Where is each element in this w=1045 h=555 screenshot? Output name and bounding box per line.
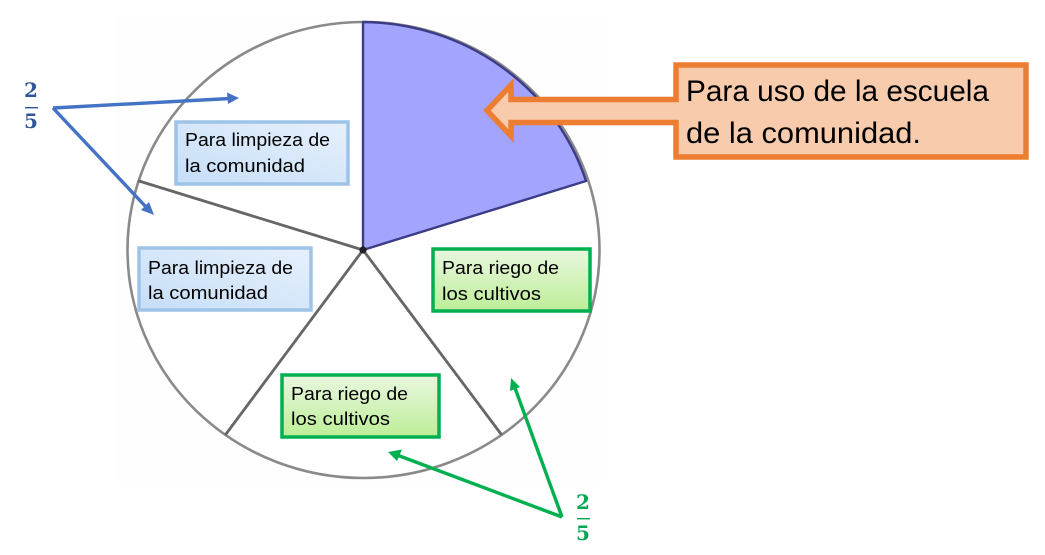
- label: community cleaning (lower): la comunidad: [148, 282, 268, 303]
- callout: school use with arrow: de la comunidad.: [686, 117, 921, 150]
- label: crop irrigation (right): los cultivos: [442, 283, 541, 304]
- arrows: blue fraction to cleaning sectors: [53, 92, 239, 215]
- image background: [115, 16, 603, 483]
- spokes: [139, 181, 501, 434]
- label: crop irrigation (right): [433, 249, 590, 311]
- fraction: two fifths, blue: 5: [24, 109, 38, 133]
- center point: [359, 246, 367, 254]
- circle outline: [128, 22, 600, 478]
- label: community cleaning (upper): Para limpieza de: [185, 129, 330, 150]
- highlighted sector: school use: [363, 22, 586, 250]
- fraction: two fifths, green: [576, 490, 590, 545]
- pie chart: circle divided into five parts: [115, 16, 603, 483]
- callout: school use with arrow: [487, 65, 1026, 157]
- label: crop irrigation (bottom): Para riego de: [291, 383, 408, 404]
- fraction: two fifths, blue: 2: [24, 78, 38, 102]
- fraction: two fifths, green: 5: [576, 521, 590, 545]
- label: community cleaning (lower): Para limpieza de: [148, 257, 293, 278]
- label: community cleaning (upper): [176, 122, 348, 184]
- callout arrow and box: [487, 65, 1026, 157]
- label: community cleaning (upper): la comunidad: [185, 155, 305, 176]
- label: crop irrigation (right): Para riego de: [442, 257, 559, 278]
- fraction: two fifths, green: 2: [576, 490, 590, 514]
- label: community cleaning (lower): [139, 248, 311, 310]
- label: crop irrigation (bottom): los cultivos: [291, 408, 390, 429]
- arrows: green fraction to irrigation sectors: [388, 378, 562, 517]
- callout: school use with arrow: Para uso de la escuela: [686, 75, 990, 108]
- fraction: two fifths, blue: [24, 78, 38, 133]
- label: crop irrigation (bottom): [282, 375, 439, 437]
